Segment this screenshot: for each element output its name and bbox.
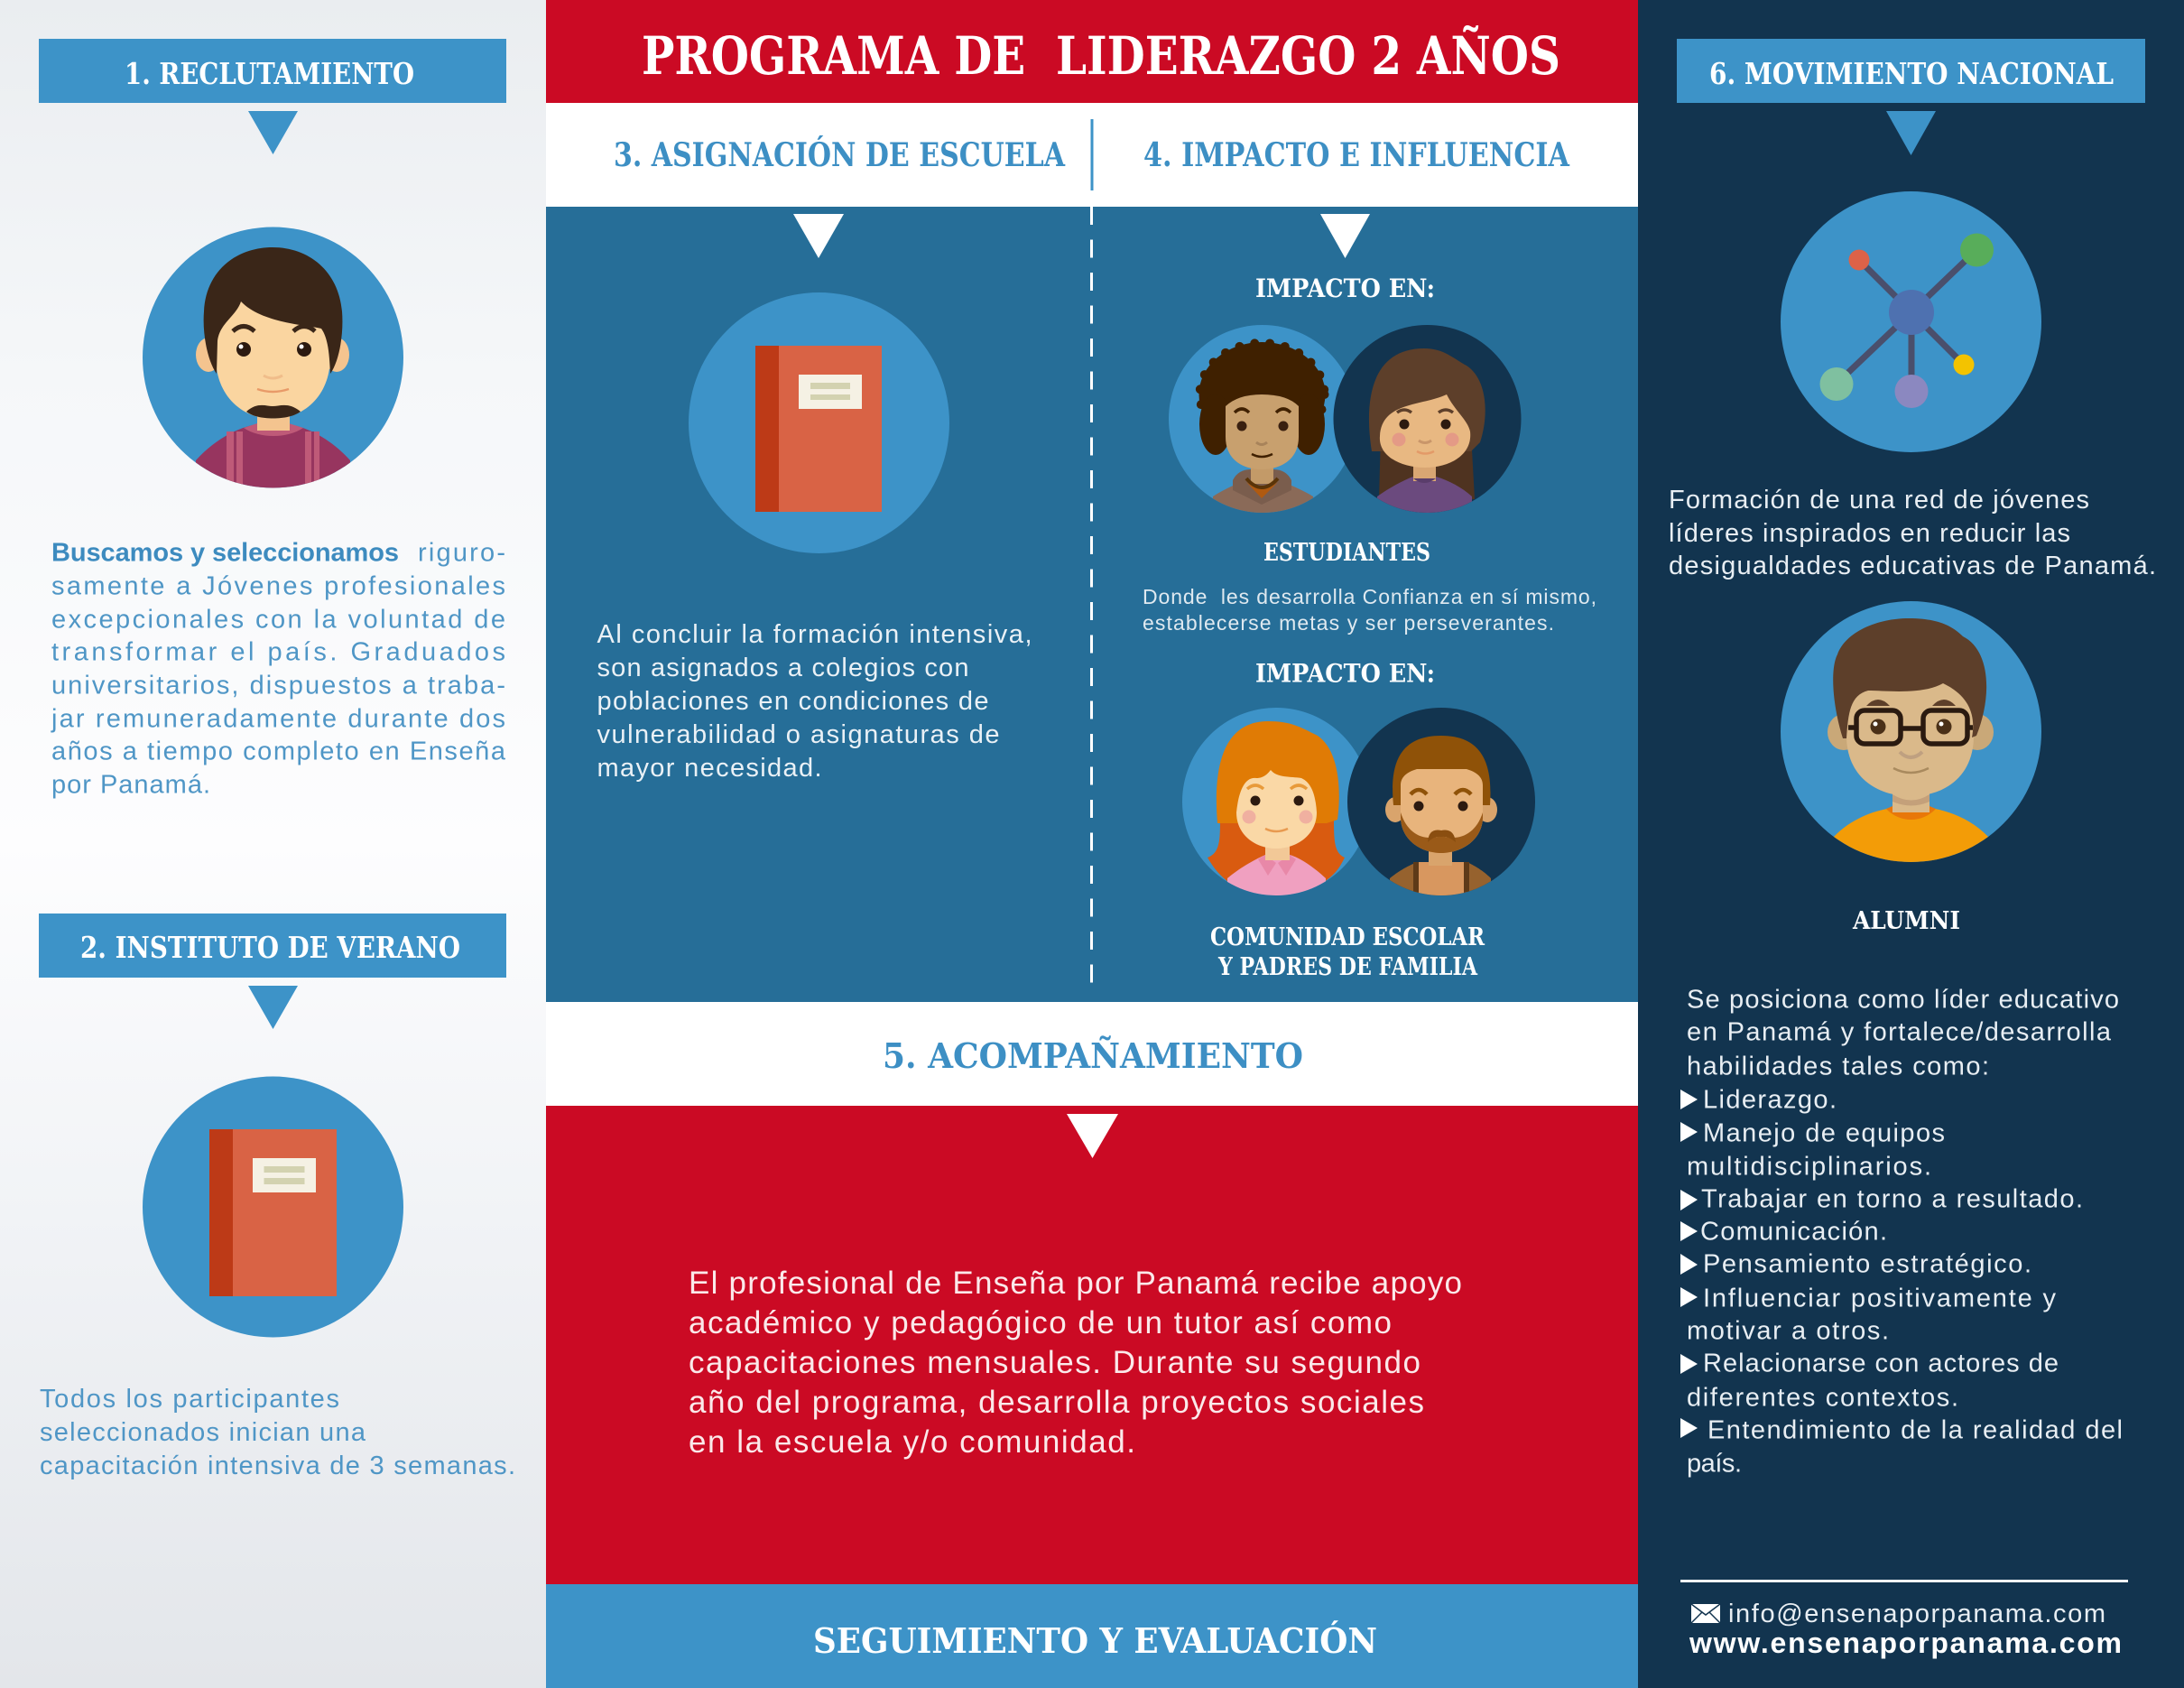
panel: 4. impacto e influencia: [1143, 214, 1596, 981]
icon: book: [143, 1076, 403, 1338]
text: movimiento description: Formación de una red de jóvenes: [1669, 486, 2089, 515]
panel: 5. acompañamiento heading band: [546, 1002, 1638, 1106]
arrow: down: [248, 986, 298, 1029]
text: reclutamiento description: samente a Jóvenes profesionales: [51, 572, 505, 601]
icon: man with moustache avatar: [1347, 708, 1535, 898]
text: reclutamiento description: por Panamá.: [51, 771, 210, 800]
heading: impacto en estudiantes: IMPACTO EN:: [1255, 274, 1435, 303]
icon: young man with beard avatar: [143, 227, 403, 505]
text: movimiento description: [1669, 486, 2156, 580]
heading: 2. instituto de verano: 2. INSTITUTO DE VERANO: [80, 930, 460, 965]
panel: 6. movimiento nacional: [1638, 0, 2184, 1688]
text: asignación description: mayor necesidad.: [597, 754, 821, 783]
text: alumni description and bullet list: Trabajar en torno a resultado.: [1701, 1184, 2083, 1213]
text: movimiento description: desigualdades educativas de Panamá.: [1669, 552, 2156, 580]
text: alumni description and bullet list: Pensamiento estratégico.: [1703, 1249, 2031, 1278]
panel: 5. acompañamiento: [546, 1106, 1638, 1584]
icons: list bullets: [1680, 1090, 1698, 1438]
label: comunidad escolar y padres de familia: Y PADRES DE FAMILIA: [1217, 953, 1478, 981]
text: reclutamiento description: riguro-: [418, 538, 505, 567]
icon: alumni with glasses avatar: [1781, 601, 2041, 876]
text: reclutamiento description: jar remuneradamente durante dos: [51, 704, 505, 733]
text: alumni description and bullet list: Comunicación.: [1700, 1217, 1887, 1246]
text: alumni description and bullet list: Entendimiento de la realidad del: [1707, 1415, 2123, 1444]
text: website: www.ensenaporpanama.com: [1689, 1627, 2122, 1659]
panel: sections 3 and 4 background: [546, 207, 1638, 1002]
text: alumni description and bullet list: en Panamá y fortalece/desarrolla: [1687, 1018, 2112, 1047]
heading: 1. reclutamiento: 1. RECLUTAMIENTO: [125, 56, 414, 91]
icon: envelope: [1691, 1604, 1720, 1623]
text: asignación description: son asignados a colegios con: [597, 654, 969, 682]
text: movimiento description: líderes inspirados en reducir las: [1669, 519, 2070, 548]
text: alumni description and bullet list: Influenciar positivamente y: [1703, 1284, 2056, 1312]
icon: network: [1781, 191, 2041, 452]
panel: 1. reclutamiento: [39, 39, 506, 800]
text: alumni description and bullet list: habilidades tales como:: [1687, 1053, 1989, 1081]
text: reclutamiento description: [51, 538, 506, 800]
text: acompañamiento description: año del programa, desarrolla proyectos sociales: [689, 1385, 1424, 1420]
arrow: down: [1886, 111, 1936, 155]
title: PROGRAMA DE LIDERAZGO 2 AÑOS: [642, 25, 1560, 87]
label: comunidad escolar y padres de familia: COMUNIDAD ESCOLAR: [1210, 923, 1485, 951]
text: instituto description: Todos los participantes: [40, 1385, 339, 1414]
icon: woman with orange hair avatar: [1182, 708, 1370, 898]
text: alumni description and bullet list: Manejo de equipos: [1703, 1119, 1945, 1148]
text: alumni description and bullet list: Liderazgo.: [1703, 1085, 1837, 1114]
text: alumni description and bullet list: multidisciplinarios.: [1687, 1152, 1931, 1181]
text: asignación description: Al concluir la formación intensiva,: [597, 620, 1032, 649]
panel: 2. instituto de verano: [39, 914, 515, 1480]
heading: seguimiento y evaluación: SEGUIMIENTO Y EVALUACIÓN: [813, 1620, 1377, 1661]
text: reclutamiento description: años a tiempo completo en Enseña: [51, 737, 506, 765]
text: estudiantes description: [1143, 585, 1596, 635]
text: instituto description: capacitación intensiva de 3 semanas.: [40, 1451, 515, 1480]
heading: 2. instituto de verano: [39, 914, 506, 978]
text: email: info@ensenaporpanama.com: [1728, 1600, 2105, 1628]
icon: student with afro avatar: [1169, 325, 1356, 513]
label: alumni: ALUMNI: [1852, 907, 1960, 935]
text: acompañamiento description: académico y pedagógico de un tutor así como: [689, 1305, 1392, 1340]
text: instituto description: [40, 1385, 515, 1480]
text: alumni description and bullet list: país.: [1687, 1450, 1742, 1479]
text: estudiantes description: establecerse metas y ser perseverantes.: [1143, 611, 1554, 635]
heading: 3. asignación de escuela: 3. ASIGNACIÓN DE ESCUELA: [614, 136, 1066, 174]
label: estudiantes: ESTUDIANTES: [1263, 539, 1430, 567]
panel: white heading band for sections 3 and 4: [546, 103, 1638, 207]
arrow: down: [248, 111, 298, 154]
panel: left column background: [0, 0, 546, 1688]
heading: 4. impacto e influencia: 4. IMPACTO E INFLUENCIA: [1143, 136, 1570, 174]
text: reclutamiento description: Buscamos y seleccionamos: [51, 538, 399, 567]
text: alumni description and bullet list: Se posiciona como líder educativo: [1687, 986, 2119, 1015]
heading: 6. movimiento nacional: 6. MOVIMIENTO NACIONAL: [1709, 56, 2114, 91]
heading: impacto en comunidad: IMPACTO EN:: [1255, 659, 1435, 688]
text: reclutamiento description: excepcionales con la voluntad de: [51, 605, 505, 634]
label: comunidad escolar y padres de familia: [1210, 923, 1485, 981]
panel: title banner: [546, 0, 1638, 103]
text: estudiantes description: Donde les desarrolla Confianza en sí mismo,: [1143, 585, 1596, 608]
panel: seguimiento y evaluación: [546, 1584, 1638, 1688]
arrow: down: [793, 214, 844, 258]
text: acompañamiento description: capacitaciones mensuales. Durante su segundo: [689, 1345, 1421, 1380]
text: asignación description: [597, 620, 1032, 783]
text: alumni description and bullet list: motivar a otros.: [1687, 1316, 1889, 1345]
text: reclutamiento description: universitarios, dispuestos a traba-: [51, 672, 505, 700]
text: asignación description: poblaciones en condiciones de: [597, 687, 989, 716]
arrow: down: [1320, 214, 1370, 258]
heading: 1. reclutamiento: [39, 39, 506, 103]
text: acompañamiento description: en la escuela y/o comunidad.: [689, 1424, 1135, 1460]
text: instituto description: seleccionados inician una: [40, 1418, 366, 1447]
text: alumni description and bullet list: Relacionarse con actores de: [1703, 1349, 2059, 1377]
icon: book: [689, 292, 949, 553]
heading: 5. acompañamiento: 5. ACOMPAÑAMIENTO: [883, 1035, 1303, 1076]
text: acompañamiento description: El profesional de Enseña por Panamá recibe apoyo: [689, 1266, 1462, 1301]
text: alumni description and bullet list: diferentes contextos.: [1687, 1383, 1958, 1412]
text: reclutamiento description: transformar el país. Graduados: [51, 637, 505, 666]
text: acompañamiento description: [689, 1266, 1462, 1460]
heading: 6. movimiento nacional: [1677, 39, 2145, 103]
arrow: down: [1067, 1114, 1118, 1158]
text: alumni description and bullet list: [1687, 986, 2123, 1479]
panel: 3. asignación de escuela: [597, 214, 1032, 783]
icon: student with long hair avatar: [1334, 325, 1522, 513]
text: asignación description: vulnerabilidad o asignaturas de: [597, 720, 1000, 749]
